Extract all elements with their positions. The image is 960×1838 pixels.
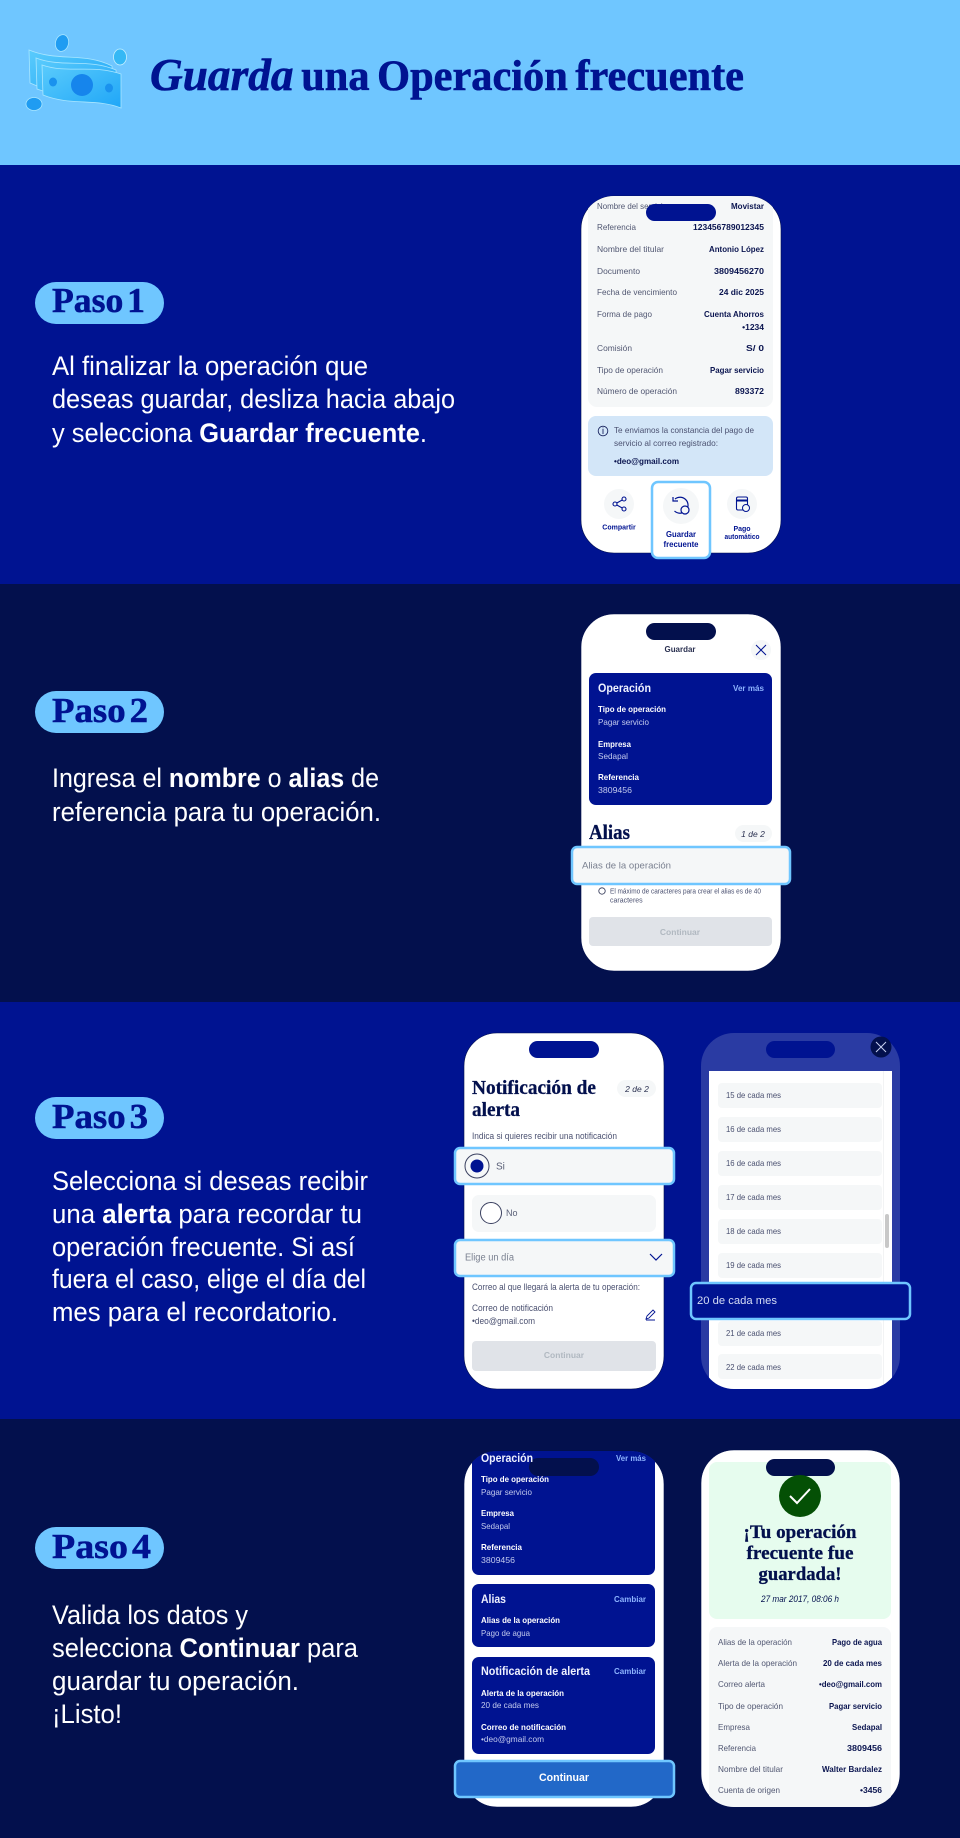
success card: guardada!	[758, 1564, 842, 1585]
operation card: Referencia	[481, 1542, 522, 1552]
action: pago automático: automático	[724, 534, 760, 541]
paso 1 label: Paso 1	[52, 281, 145, 320]
alias input highlighted: Alias de la operación	[582, 860, 671, 872]
phone: confirmación	[701, 1450, 900, 1817]
option no: No	[506, 1208, 518, 1218]
notification email	[472, 1303, 655, 1326]
notification card: Notificación de alerta	[481, 1664, 590, 1678]
list sheet: 21 de cada mes	[726, 1328, 781, 1338]
detail card: Walter Bardalez	[822, 1764, 882, 1774]
continue button disabled	[589, 917, 772, 946]
notification email: Correo de notificación	[472, 1303, 553, 1313]
phone: resultado de operación	[581, 190, 781, 558]
paso 4 label	[35, 1527, 164, 1569]
operation card: Ver más	[733, 683, 764, 693]
title: Guarda una Operación frecuente	[150, 49, 744, 100]
icon: check	[779, 1475, 821, 1517]
day select highlighted: Elige un día	[465, 1252, 514, 1264]
heading: alerta	[472, 1099, 520, 1121]
detail card: Cuenta Ahorros	[704, 309, 764, 319]
detail card: Tipo de operación	[597, 365, 663, 375]
heading	[472, 1077, 596, 1121]
paso 1 description	[52, 351, 455, 448]
continue button disabled: Continuar	[660, 927, 701, 937]
close button	[870, 1036, 892, 1058]
action: guardar frecuente highlighted	[652, 482, 710, 558]
detail card: Fecha de vencimiento	[597, 287, 677, 297]
continue button highlighted	[455, 1761, 674, 1797]
detail card: Comisión	[597, 343, 632, 353]
paso 2 label: Paso 2	[52, 691, 148, 730]
detail card	[709, 1627, 891, 1817]
detail card: 3809456	[847, 1743, 882, 1753]
detail card: •1234	[742, 322, 764, 332]
step pill: 1 de 2	[741, 829, 765, 839]
paso 1 label	[35, 281, 164, 324]
alias heading: Alias	[589, 820, 630, 844]
operation card: 3809456	[481, 1555, 515, 1565]
step pill	[735, 825, 772, 842]
paso 2 description: Ingresa el nombre o alias de	[52, 763, 379, 793]
operation card: Operación	[598, 681, 651, 695]
notification card: 20 de cada mes	[481, 1700, 539, 1710]
notification email: •deo@gmail.com	[472, 1316, 535, 1326]
detail card: Movistar	[731, 201, 765, 211]
continue button disabled	[472, 1341, 656, 1371]
paso 1 description: y selecciona Guardar frecuente.	[52, 418, 427, 448]
detail card: Alerta de la operación	[718, 1658, 797, 1668]
option si highlighted: Si	[496, 1162, 505, 1172]
operation card: Empresa	[598, 739, 631, 749]
operation card: 3809456	[598, 785, 632, 795]
list sheet: 16 de cada mes	[726, 1124, 781, 1134]
list sheet: 16 de cada mes	[726, 1158, 781, 1168]
day select highlighted	[455, 1240, 674, 1276]
detail card: Referencia	[718, 1743, 756, 1753]
detail card: •3456	[860, 1785, 882, 1795]
detail card: Pago de agua	[832, 1637, 882, 1647]
notification card: Cambiar	[614, 1666, 647, 1676]
step pill: 2 de 2	[624, 1084, 649, 1094]
detail card	[588, 190, 773, 407]
detail card: Forma de pago	[597, 309, 652, 319]
helper note: caracteres	[610, 898, 643, 904]
option si highlighted	[455, 1148, 674, 1184]
paso 4 description: Valida los datos y	[52, 1600, 248, 1630]
icon: money bills and coins	[26, 33, 126, 110]
phone: notificación de alerta: Indica si quieres recibir una notificación	[472, 1131, 617, 1141]
list sheet: 22 de cada mes	[726, 1362, 781, 1372]
continue button disabled: Continuar	[544, 1350, 585, 1360]
section background: paso 3	[0, 1002, 960, 1419]
action: pago automático	[724, 489, 760, 541]
operation card: Sedapal	[598, 751, 628, 761]
detail card: Cuenta de origen	[718, 1785, 780, 1795]
action: guardar frecuente highlighted: frecuente	[664, 540, 699, 549]
alias card: Cambiar	[614, 1594, 647, 1604]
notification card: Correo de notificación	[481, 1722, 566, 1732]
close button	[751, 640, 771, 660]
helper note: El máximo de caracteres para crear el alias es de 40	[610, 888, 761, 896]
operation card: Empresa	[481, 1508, 514, 1518]
operation card	[589, 673, 772, 805]
paso 3 description: operación frecuente. Si así	[52, 1232, 355, 1262]
detail card: Empresa	[718, 1722, 750, 1732]
operation card: Tipo de operación	[481, 1474, 549, 1484]
detail card: Nombre del servicio	[597, 201, 667, 211]
phone: alias: Guardar	[664, 644, 696, 654]
action: compartir	[602, 489, 636, 532]
list sheet	[709, 1071, 892, 1391]
operation card	[472, 1440, 655, 1575]
detail card: Pagar servicio	[710, 365, 764, 375]
paso 2 description: referencia para tu operación.	[52, 797, 381, 827]
operation card: Operación	[481, 1451, 533, 1465]
paso 3 description: fuera el caso, elige el día del	[52, 1264, 366, 1294]
list sheet: 17 de cada mes	[726, 1192, 781, 1202]
heading: Notificación de	[472, 1077, 596, 1099]
action: compartir: Compartir	[602, 524, 636, 532]
detail card: 893372	[735, 386, 764, 396]
phone: notificación de alerta: Correo al que llegará la alerta de tu operación:	[472, 1282, 640, 1292]
info box	[588, 416, 773, 476]
detail card: Tipo de operación	[718, 1701, 783, 1711]
phone: alias	[572, 614, 790, 971]
detail card: 20 de cada mes	[823, 1658, 882, 1668]
operation card: Pagar servicio	[481, 1487, 532, 1497]
step pill	[617, 1080, 656, 1097]
paso 3 description: una alerta para recordar tu	[52, 1199, 362, 1229]
phone: resumen	[455, 1440, 674, 1807]
info box: •deo@gmail.com	[614, 456, 679, 466]
alias card	[472, 1584, 655, 1647]
section background: paso 1	[0, 165, 960, 584]
paso 3 description	[52, 1166, 368, 1327]
list sheet: 15 de cada mes	[726, 1090, 781, 1100]
section background: paso 4	[0, 1419, 960, 1838]
alias input highlighted	[572, 847, 790, 884]
detail card: Sedapal	[852, 1722, 882, 1732]
paso 3 label: Paso 3	[52, 1097, 148, 1136]
paso 2 label	[35, 691, 164, 733]
success card: 27 mar 2017, 08:06 h	[760, 1594, 839, 1604]
detail card: 3809456270	[714, 266, 764, 276]
paso 4 label: Paso 4	[52, 1527, 151, 1566]
selected day highlighted	[691, 1283, 910, 1319]
option no	[472, 1195, 656, 1232]
detail card: Pagar servicio	[829, 1701, 882, 1711]
detail card: Referencia	[597, 222, 636, 232]
paso 3 description: mes para el recordatorio.	[52, 1297, 338, 1327]
paso 2 description	[52, 763, 381, 827]
success card	[709, 1459, 891, 1619]
header band	[0, 0, 960, 165]
detail card: Antonio López	[709, 244, 764, 254]
notification card: Alerta de la operación	[481, 1688, 564, 1698]
detail card: Nombre del titular	[718, 1764, 783, 1774]
action: guardar frecuente highlighted: Guardar	[666, 530, 696, 539]
info box: servicio al correo registrado:	[614, 438, 718, 448]
success card: ¡Tu operación	[744, 1522, 857, 1543]
detail card: Documento	[597, 266, 640, 276]
action: pago automático: Pago	[733, 526, 751, 533]
detail card: S/ 0	[746, 343, 764, 353]
operation card: Pagar servicio	[598, 717, 649, 727]
section background: paso 2	[0, 584, 960, 1002]
paso 1 description: deseas guardar, desliza hacia abajo	[52, 384, 455, 414]
notification card	[472, 1657, 655, 1754]
detail card: Alias de la operación	[718, 1637, 792, 1647]
success card: frecuente fue	[746, 1543, 854, 1564]
alias card: Pago de agua	[481, 1628, 530, 1638]
paso 1 description: Al finalizar la operación que	[52, 351, 368, 381]
list sheet: 19 de cada mes	[726, 1260, 781, 1270]
detail card: Nombre del titular	[597, 244, 664, 254]
detail card: 24 dic 2025	[719, 287, 764, 297]
paso 4 description: guardar tu operación.	[52, 1666, 299, 1696]
detail card: Correo alerta	[718, 1679, 765, 1689]
notch	[646, 204, 716, 221]
detail card: •deo@gmail.com	[819, 1679, 882, 1689]
helper note	[599, 888, 761, 904]
detail card: 123456789012345	[693, 222, 764, 232]
paso 3 description: Selecciona si deseas recibir	[52, 1166, 368, 1196]
continue button highlighted: Continuar	[539, 1772, 590, 1784]
paso 4 description: ¡Listo!	[52, 1699, 122, 1729]
operation card: Referencia	[598, 772, 639, 782]
selected day highlighted: 20 de cada mes	[697, 1295, 778, 1307]
paso 3 label	[35, 1097, 164, 1139]
operation card: Ver más	[616, 1453, 646, 1463]
phone: notificación de alerta	[455, 1033, 674, 1389]
detail card: Número de operación	[597, 386, 677, 396]
operation card: Sedapal	[481, 1521, 510, 1531]
paso 4 description	[52, 1600, 359, 1729]
paso 4 description: selecciona Continuar para	[52, 1633, 359, 1663]
alias card: Alias de la operación	[481, 1615, 560, 1625]
phone: selector de día	[691, 1033, 910, 1391]
operation card: Tipo de operación	[598, 704, 666, 714]
list sheet: 18 de cada mes	[726, 1226, 781, 1236]
notification card: •deo@gmail.com	[481, 1734, 544, 1744]
info box: Te enviamos la constancia del pago de	[614, 425, 754, 435]
alias card: Alias	[481, 1592, 506, 1606]
